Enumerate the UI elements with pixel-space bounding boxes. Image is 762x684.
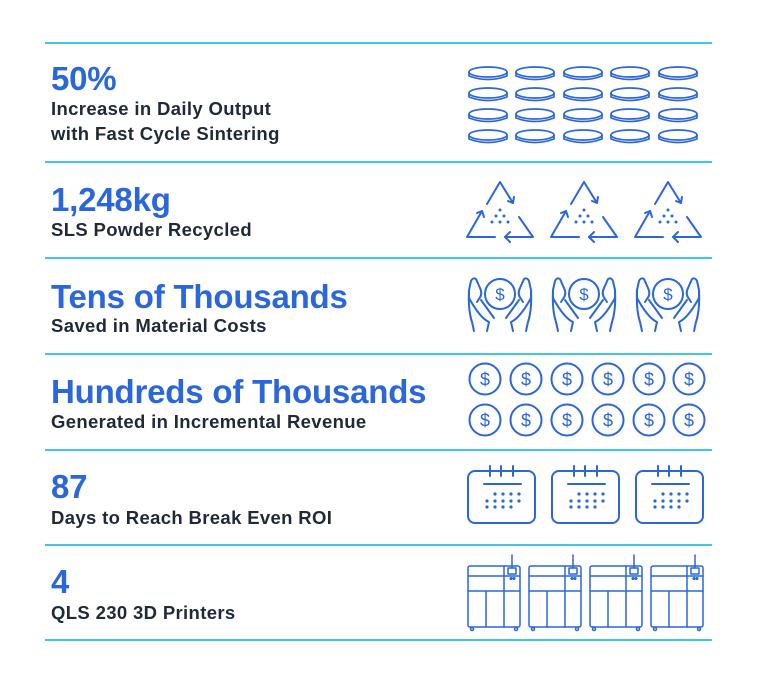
- icons: printers: [468, 555, 703, 630]
- icon grid: pucks: [469, 67, 697, 142]
- subtitle: powder recycled: SLS Powder Recycled: [51, 219, 252, 240]
- subtitle: daily output: [51, 98, 280, 144]
- subtitle: material costs: Saved in Material Costs: [51, 315, 267, 336]
- subtitle: revenue: Generated in Incremental Revenue: [51, 411, 367, 432]
- heading: hundreds of thousands: Hundreds of Thousands: [51, 373, 426, 410]
- heading: 4: 4: [51, 563, 69, 600]
- icons: hands holding coin: [469, 278, 699, 331]
- subtitle: printers: QLS 230 3D Printers: [51, 602, 236, 623]
- heading: 1,248kg: 1,248kg: [51, 181, 171, 218]
- heading: 50%: 50%: [51, 60, 116, 97]
- heading: 87: 87: [51, 468, 87, 505]
- subtitle: daily output: Increase in Daily Output: [51, 98, 271, 119]
- icons: recycle triangles: [467, 182, 701, 242]
- subtitle: break even: Days to Reach Break Even ROI: [51, 507, 332, 528]
- subtitle: daily output: with Fast Cycle Sintering: [51, 123, 280, 144]
- icons: calendars: [468, 466, 703, 523]
- heading: tens of thousands: Tens of Thousands: [51, 278, 348, 315]
- icons: dollar coins: [470, 364, 704, 436]
